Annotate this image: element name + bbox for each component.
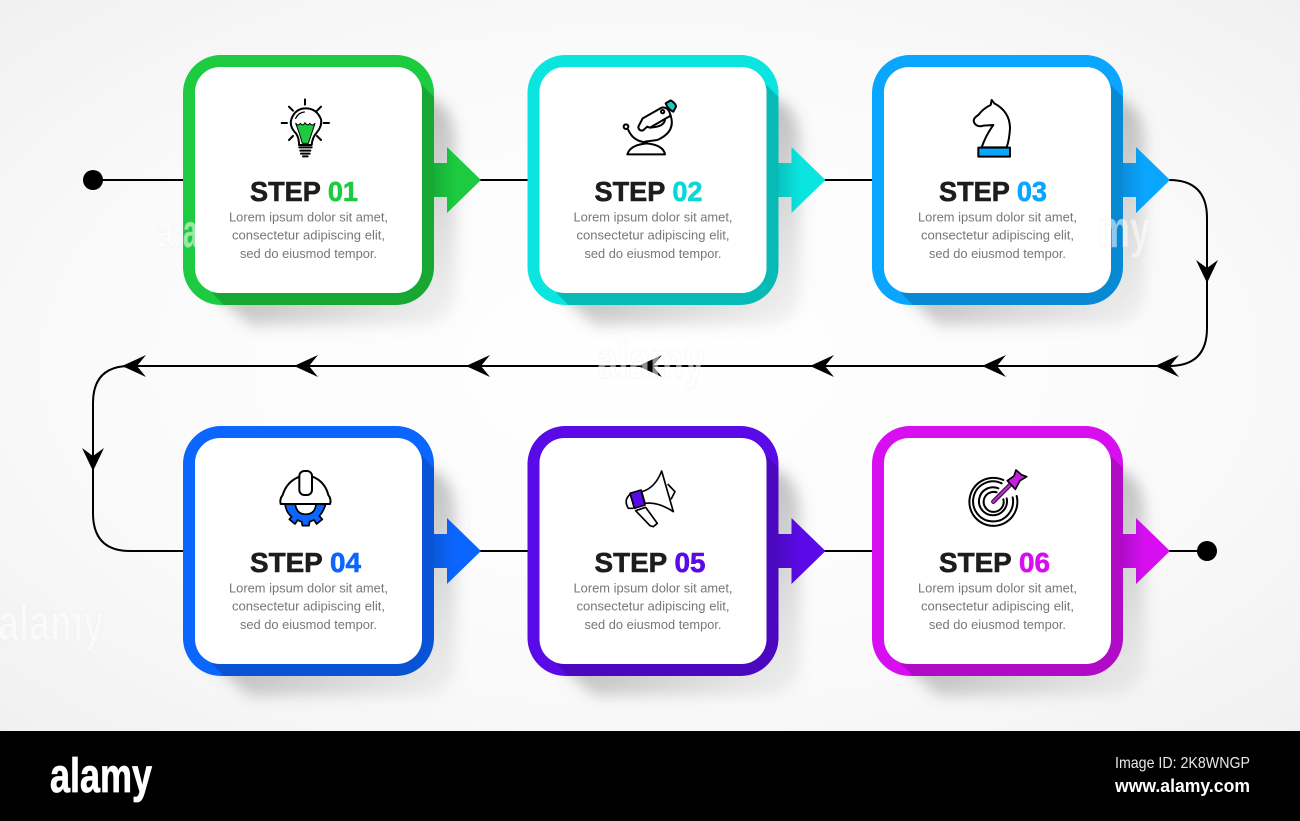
text block: consectetur adipiscing elit, <box>576 228 730 242</box>
watermarks <box>0 201 1150 652</box>
arrow <box>1119 147 1170 213</box>
arrow <box>774 518 826 584</box>
ring shade <box>556 456 778 676</box>
inner white card <box>540 438 766 664</box>
end dot <box>1197 541 1217 561</box>
watermarks: alamy <box>597 332 705 390</box>
heading: STEP 05 <box>594 547 706 578</box>
text block: Lorem ipsum dolor sit amet, <box>574 210 732 224</box>
text block: sed do eiusmod tempor. <box>584 617 722 632</box>
text block: consectetur adipiscing elit, <box>921 228 1074 242</box>
text block: Lorem ipsum dolor sit amet, <box>918 210 1077 224</box>
text block: Lorem ipsum dolor sit amet, <box>229 210 388 224</box>
panel: step 03 <box>872 55 1170 325</box>
text block <box>229 210 388 261</box>
heading: STEP 06 <box>939 547 1050 578</box>
text block: Lorem ipsum dolor sit amet, <box>918 580 1077 596</box>
watermarks: a <box>183 205 198 257</box>
arrowheads on connector <box>82 260 1218 471</box>
text block: sed do eiusmod tempor. <box>929 617 1066 632</box>
text block: Lorem ipsum dolor sit amet, <box>574 580 732 596</box>
ring shade <box>901 456 1123 676</box>
colored ring <box>183 55 434 305</box>
colored ring <box>872 55 1123 305</box>
heading: STEP 03 <box>939 176 1047 207</box>
text block: Lorem ipsum dolor sit amet, <box>229 580 388 596</box>
ring shade <box>901 85 1123 305</box>
text block <box>918 580 1077 632</box>
text block: consectetur adipiscing elit, <box>232 598 385 614</box>
colored ring <box>528 426 778 676</box>
heading: STEP 04 <box>250 547 361 578</box>
heading: STEP 02 <box>594 176 702 207</box>
text block <box>574 210 732 261</box>
ring shade <box>556 85 778 305</box>
website: www.alamy.com <box>1114 776 1250 796</box>
inner white card <box>540 67 766 293</box>
heading: STEP 01 <box>250 176 358 207</box>
watermarks: my <box>1098 201 1150 259</box>
text block: consectetur adipiscing elit, <box>921 598 1074 614</box>
watermarks: a <box>156 205 174 257</box>
arrow <box>430 518 481 584</box>
arrow <box>774 147 826 213</box>
text block: sed do eiusmod tempor. <box>584 246 722 261</box>
ring shade <box>212 85 434 305</box>
panel: step 06 <box>872 426 1170 696</box>
text block: consectetur adipiscing elit, <box>576 598 730 614</box>
watermarks: alamy <box>0 594 104 652</box>
text block: sed do eiusmod tempor. <box>240 246 377 261</box>
inner white card <box>195 438 422 664</box>
icon: helmet and gear <box>280 471 331 526</box>
arrow <box>1119 518 1170 584</box>
inner white card <box>195 67 422 293</box>
footer logo: alamy <box>50 750 152 803</box>
text block: sed do eiusmod tempor. <box>929 246 1066 261</box>
ring shade <box>212 456 434 676</box>
panel: step 01 <box>183 55 481 325</box>
panel: step 04 <box>183 426 481 696</box>
icon: light bulb <box>282 99 329 156</box>
colored ring <box>528 55 778 305</box>
text block <box>229 580 388 632</box>
icon: chess knight <box>974 100 1010 157</box>
connector path <box>93 180 1207 551</box>
text block <box>574 580 732 632</box>
colored ring <box>872 426 1123 676</box>
text block <box>918 210 1077 261</box>
inner white card <box>884 438 1111 664</box>
image id: Image ID: 2K8WNGP <box>1115 755 1250 772</box>
footer bar <box>0 731 1300 821</box>
icon: microscope <box>624 100 676 154</box>
panel: step 02 <box>528 55 826 325</box>
arrow <box>430 147 481 213</box>
text block: consectetur adipiscing elit, <box>232 228 385 242</box>
panel: step 05 <box>528 426 826 696</box>
icon: target with dart <box>969 470 1027 526</box>
inner white card <box>884 67 1111 293</box>
colored ring <box>183 426 434 676</box>
icon: megaphone <box>626 471 675 527</box>
start dot <box>83 170 103 190</box>
text block: sed do eiusmod tempor. <box>240 617 377 632</box>
